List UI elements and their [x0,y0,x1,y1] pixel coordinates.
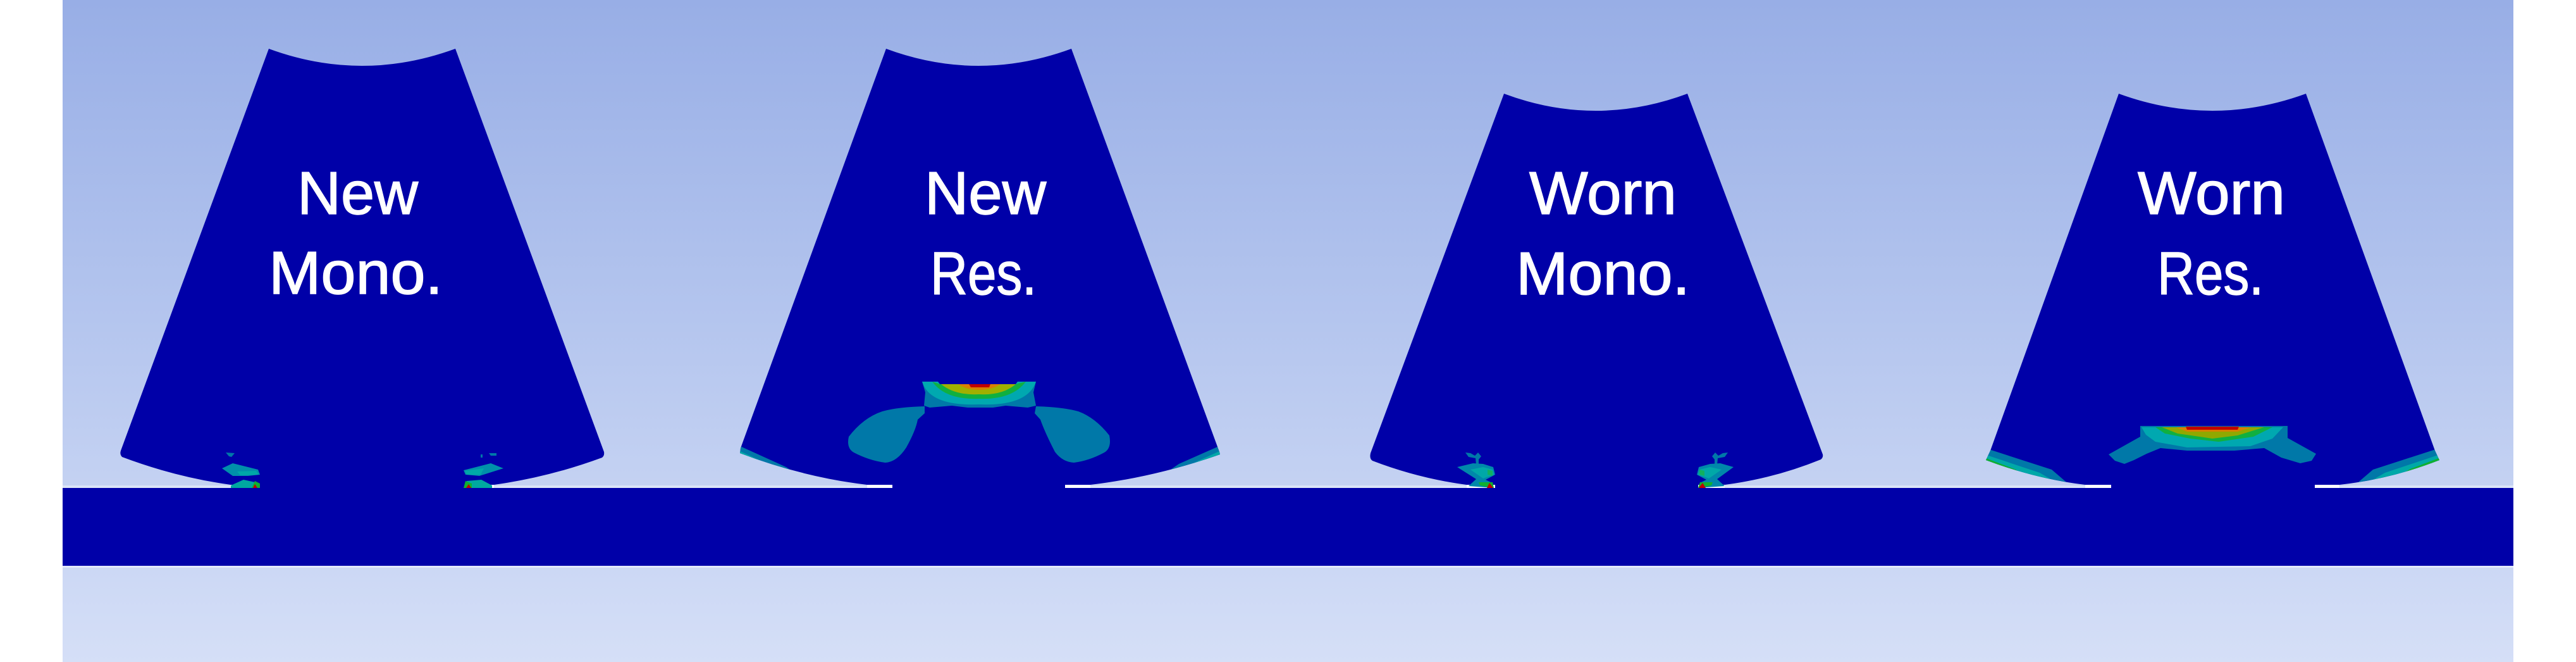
stress spots: right root [464,453,503,488]
tooth body [1986,94,2439,488]
stress spots: right root [1697,453,1734,488]
stress contour: right edge strip [2358,449,2439,482]
label: Worn Res. [2138,159,2285,308]
tooth: Worn Res. [1983,94,2442,488]
tooth: Worn Mono. [1370,94,1823,488]
tooth body [120,49,604,488]
tooth body [740,49,1220,488]
label: New Mono.: New [297,159,419,227]
label: Worn Res.: Worn [2138,159,2285,227]
tooth body [1370,94,1823,488]
tooth: New Res. [739,49,1222,488]
contact highlight line above rim [63,485,2513,488]
stress contour: right lobe [1035,406,1110,463]
label: New Res. [925,159,1047,308]
tooth: New Mono. [120,49,604,488]
label: New Mono. [269,159,443,307]
stress contour: central cap [2109,426,2316,464]
stress contour: left edge strip [1986,449,2067,482]
label: New Res.: New [925,159,1047,227]
stress spots: left root [222,453,260,488]
gear rim bar [63,488,2513,566]
label: New Mono.: Mono. [269,239,443,307]
stress spots: left root [1457,453,1495,488]
label: Worn Mono.: Mono. [1516,240,1690,308]
rim bottom highlight [63,566,2513,568]
stress contour: right edge strip [1171,447,1220,470]
label: Worn Mono.: Worn [1529,159,1677,227]
stress contour: left edge strip [740,447,791,470]
label: Worn Res.: Res. [2157,240,2264,308]
stress contour: central crescent [922,382,1036,408]
stress contour: left lobe [848,406,925,463]
label: New Res.: Res. [930,240,1037,308]
label: Worn Mono. [1516,159,1690,308]
